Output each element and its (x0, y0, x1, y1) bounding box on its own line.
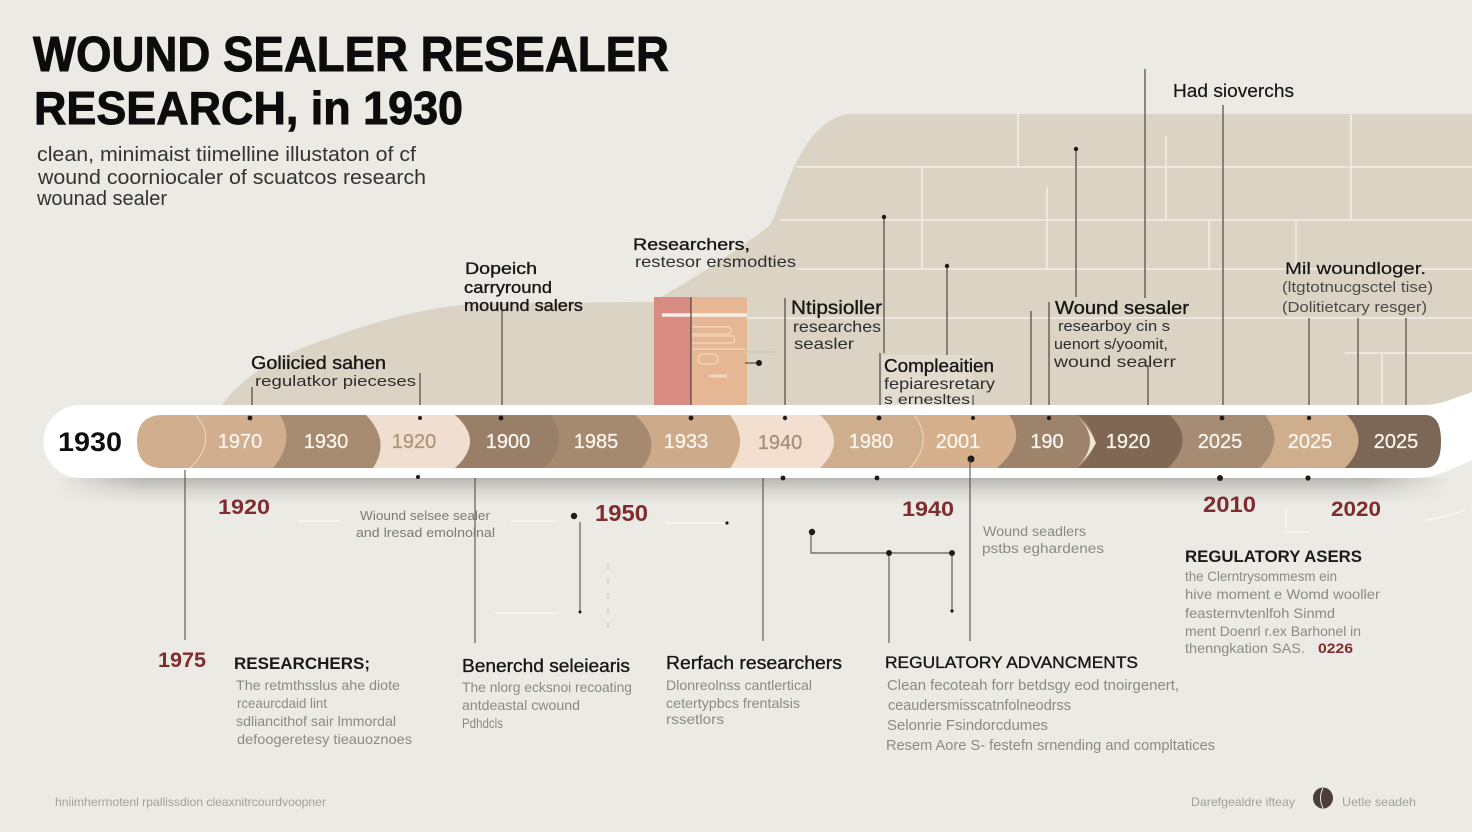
subtitle: wound coorniocaler of scuatcos research (37, 167, 426, 189)
callout: Wound sesaler: wound sealerr (1053, 354, 1177, 371)
timeline year labels: 2001 (936, 431, 980, 453)
timeline year labels: 1970 (218, 431, 262, 453)
callout: Had sioverchs: Had sioverchs (1173, 81, 1294, 101)
timeline year labels: 1920 (1106, 431, 1150, 453)
year markers: 1950 (595, 500, 648, 526)
callout: Mil woundloger: (ltgtotnucgsctel tise) (1282, 280, 1433, 296)
callout: Researchers: Researchers, (633, 235, 750, 254)
subtitle (36, 144, 426, 210)
callout: Wound sesaler: uenort s/yoomit, (1054, 336, 1168, 353)
illustration: document panel (654, 297, 775, 405)
timeline year labels: 1930 (304, 431, 348, 453)
footer right: Uetle seadeh (1342, 795, 1416, 809)
title: RESEARCH, in 1930 (34, 82, 463, 134)
text block: regulatory asers: ment Doenrl r.ex Barhonel in (1185, 623, 1361, 639)
text block: benerchd seleiearis: antdeastal cwound (462, 697, 580, 713)
timeline year labels: 1900 (486, 431, 530, 453)
timeline marker dots (248, 416, 1311, 481)
note: wound selsee: and lresad emolnolnal (356, 525, 495, 540)
text block: rerfach researchers: rssetlors (666, 711, 724, 727)
icon: seed mark (1313, 788, 1333, 808)
note: wound selsee: Wiound selsee sealer (360, 508, 491, 523)
subtitle: clean, minimaist tiimelline illustaton of cf (37, 144, 416, 166)
callout: Dopeich (464, 259, 583, 315)
timeline year labels: 1933 (664, 431, 708, 453)
callout: Ntipsioller: researches (793, 319, 881, 336)
note: wound seadlers: Wound seadlers (983, 524, 1086, 539)
year markers: 2010 (1203, 492, 1256, 517)
timeline year labels: 1985 (574, 431, 618, 453)
text block: regulatory advancments: Selonrie Fsindorcdumes (887, 718, 1048, 734)
year markers: 2020 (1331, 498, 1381, 521)
text block: regulatory asers: feasternvtenlfoh Sinmd (1185, 605, 1335, 621)
note: wound selsee (356, 508, 495, 540)
footer right (1191, 788, 1416, 809)
text block: researchers: RESEARCHERS; (234, 655, 370, 673)
timeline year labels: 2025 (1198, 431, 1242, 453)
text block: researchers: defoogeretesy tieauoznoes (237, 731, 412, 747)
text block: researchers: sdliancithof sair lmmordal (236, 713, 396, 729)
timeline year labels: 1980 (849, 431, 893, 453)
callout: Compleaitien: s ernesltes (884, 391, 970, 407)
timeline year labels: 2025 (1374, 431, 1418, 453)
callout: Wound sesaler (1053, 298, 1189, 371)
callout: Ntipsioller (791, 298, 883, 353)
callout: Dopeich: Dopeich (465, 259, 537, 278)
text block: benerchd seleiearis (462, 656, 632, 731)
callout: Mil woundloger: Mil woundloger. (1285, 259, 1426, 278)
callout: Researchers (633, 235, 796, 271)
callout: Researchers: restesor ersmodties (635, 254, 796, 271)
text block: regulatory asers: REGULATORY ASERS (1185, 547, 1362, 566)
text block: regulatory asers: thenngkation SAS. (1185, 640, 1305, 656)
text block: rerfach researchers: Rerfach researchers (666, 653, 842, 673)
note: wound seadlers (982, 524, 1104, 556)
text block: benerchd seleiearis: The nlorg ecksnoi recoating (462, 679, 632, 695)
timeline start year: 1930 (58, 427, 122, 457)
text block: regulatory advancments: Clean fecoteah forr betdsgy eod tnoirgenert, (887, 678, 1179, 694)
text block: researchers: The retmthsslus ahe diote (236, 677, 400, 693)
text block: regulatory asers: 0226 (1318, 640, 1353, 656)
year markers: 1940 (902, 498, 954, 521)
footer right: Darefgealdre ifteay (1191, 795, 1295, 809)
timeline year labels: 1920 (392, 431, 436, 453)
text block: regulatory advancments: Resem Aore S- festefn srnending and compltatices (886, 738, 1215, 754)
callout: Compleaitien: Compleaitien (884, 356, 994, 376)
callout: Wound sesaler: researboy cin s (1058, 318, 1170, 335)
text block: rerfach researchers (666, 653, 842, 727)
footer left: hniimherrnotenl rpallissdion cleaxnitrcourdvoopner (55, 795, 326, 809)
callout: Goliicied sahen: Goliicied sahen (251, 353, 386, 373)
text block: regulatory asers: the Clerntrysommesm ein (1185, 568, 1337, 584)
callout: Dopeich: carryround (464, 278, 552, 297)
text block: regulatory advancments (885, 653, 1215, 754)
connector lines below timeline (185, 459, 1465, 643)
timeline track (44, 392, 1472, 505)
text block: researchers (234, 655, 412, 747)
callout: Goliicied sahen: regulatkor pieceses (255, 374, 416, 390)
connector lines above timeline (252, 69, 1406, 418)
callout: Compleaitien: fepiaresretary (884, 376, 995, 393)
timeline year labels: 2025 (1288, 431, 1332, 453)
year markers: 1975 (158, 649, 206, 672)
timeline year labels: 1940 (758, 432, 802, 454)
subtitle: wounad sealer (36, 188, 167, 210)
text block: regulatory asers (1185, 547, 1380, 656)
callout: Mil woundloger (1282, 259, 1433, 316)
timeline year labels (218, 431, 1418, 454)
year markers (158, 492, 1381, 672)
text block: regulatory asers: hive moment e Womd wooller (1185, 586, 1380, 602)
callout: Ntipsioller: seasler (794, 336, 855, 353)
callout: Mil woundloger: (Dolitietcary resger) (1282, 300, 1427, 316)
callout: Wound sesaler: Wound sesaler (1055, 298, 1189, 318)
text block: regulatory advancments: ceaudersmisscatnfolneodrss (888, 698, 1071, 714)
text block: rerfach researchers: Dlonreolnss cantlertical (666, 677, 812, 693)
text block: benerchd seleiearis: Benerchd seleiearis (462, 656, 630, 676)
text block: rerfach researchers: cetertypbcs frentalsis (666, 695, 800, 711)
text block: benerchd seleiearis: Pdhdcls (462, 715, 503, 731)
timeline year labels: 190 (1030, 431, 1064, 453)
note: wound seadlers: pstbs eghardenes (982, 541, 1104, 556)
title: WOUND SEALER RESEALER (33, 28, 669, 82)
callout: Dopeich: mouund salers (464, 296, 583, 315)
text block: researchers: rceaurcdaid lint (237, 695, 327, 711)
text block: regulatory advancments: REGULATORY ADVANCMENTS (885, 653, 1138, 672)
year markers: 1920 (218, 496, 270, 519)
background: beige stepped shape with grid (222, 114, 1472, 405)
title (33, 28, 669, 134)
callout: Goliicied sahen (251, 353, 416, 390)
timeline segments (137, 415, 1441, 468)
callout: Compleaitien (884, 356, 995, 407)
callout: Ntipsioller: Ntipsioller (791, 298, 883, 319)
